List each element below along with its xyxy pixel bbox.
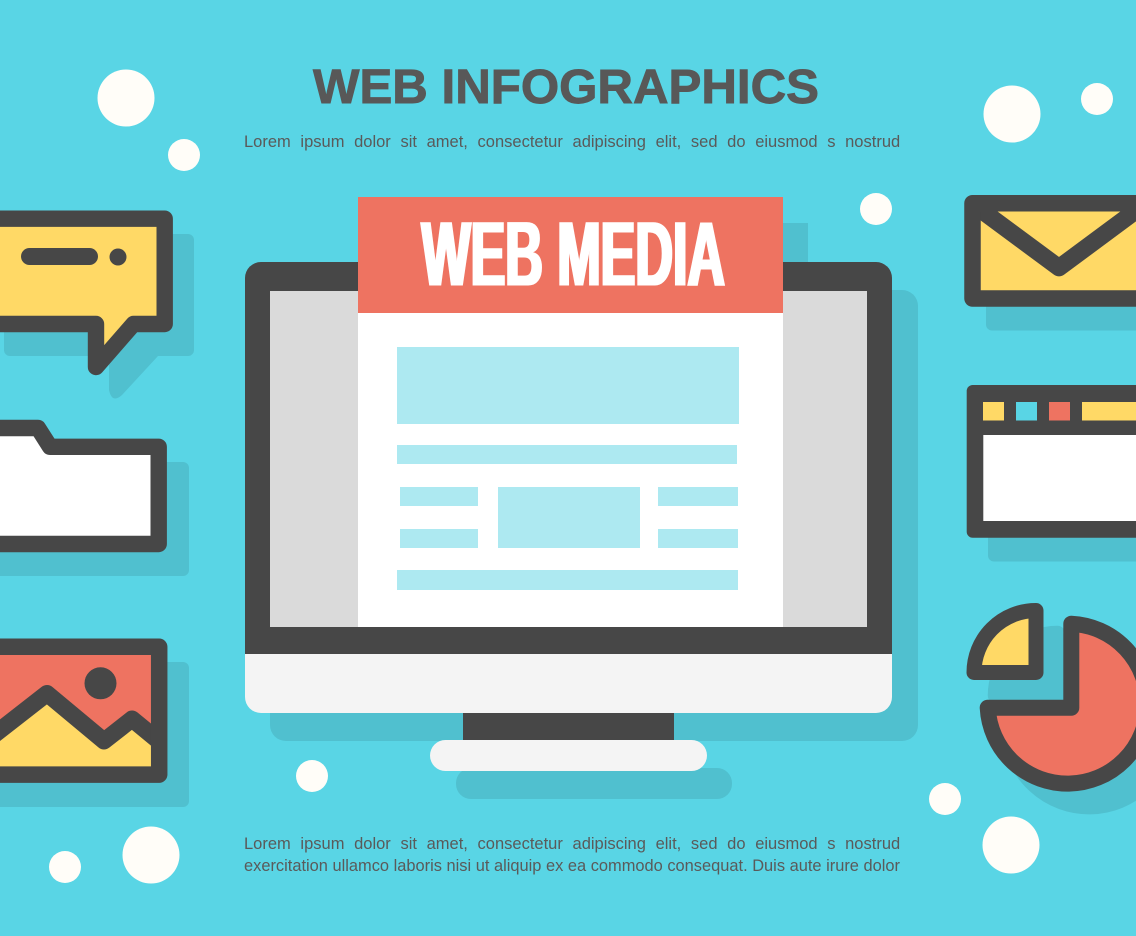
title: WEB INFOGRAPHICS — [313, 60, 819, 114]
icon: browser window — [967, 385, 1136, 562]
banner text: WEB MEDIA — [422, 204, 725, 306]
icon: pie chart — [974, 610, 1136, 807]
monitor screen — [270, 291, 867, 627]
monitor frame — [245, 262, 892, 654]
subtitle text: Lorem ipsum dolor sit amet, consectetur adipiscing elit, sed do eiusmod s nostrud — [244, 133, 900, 151]
monitor chin — [245, 640, 892, 713]
footer text: exercitation ullamco laboris nisi ut aliquip ex ea commodo consequat. Duis aute irure dolor — [244, 857, 900, 875]
icon: speech bubble — [0, 219, 194, 399]
monitor base — [430, 740, 707, 771]
monitor — [245, 262, 892, 771]
footer text: Lorem ipsum dolor sit amet, consectetur adipiscing elit, sed do eiusmod s nostrud — [244, 835, 900, 853]
monitor shadow — [270, 223, 918, 799]
pie small slice — [974, 610, 1036, 672]
page content blocks — [397, 347, 739, 590]
pie main slice — [988, 624, 1136, 784]
icon: envelope — [972, 203, 1136, 330]
icon: folder — [0, 428, 189, 576]
page header banner — [358, 197, 783, 313]
web page panel — [358, 197, 783, 627]
footer text — [244, 835, 900, 875]
icon: image — [0, 647, 189, 807]
monitor stand — [463, 705, 674, 745]
